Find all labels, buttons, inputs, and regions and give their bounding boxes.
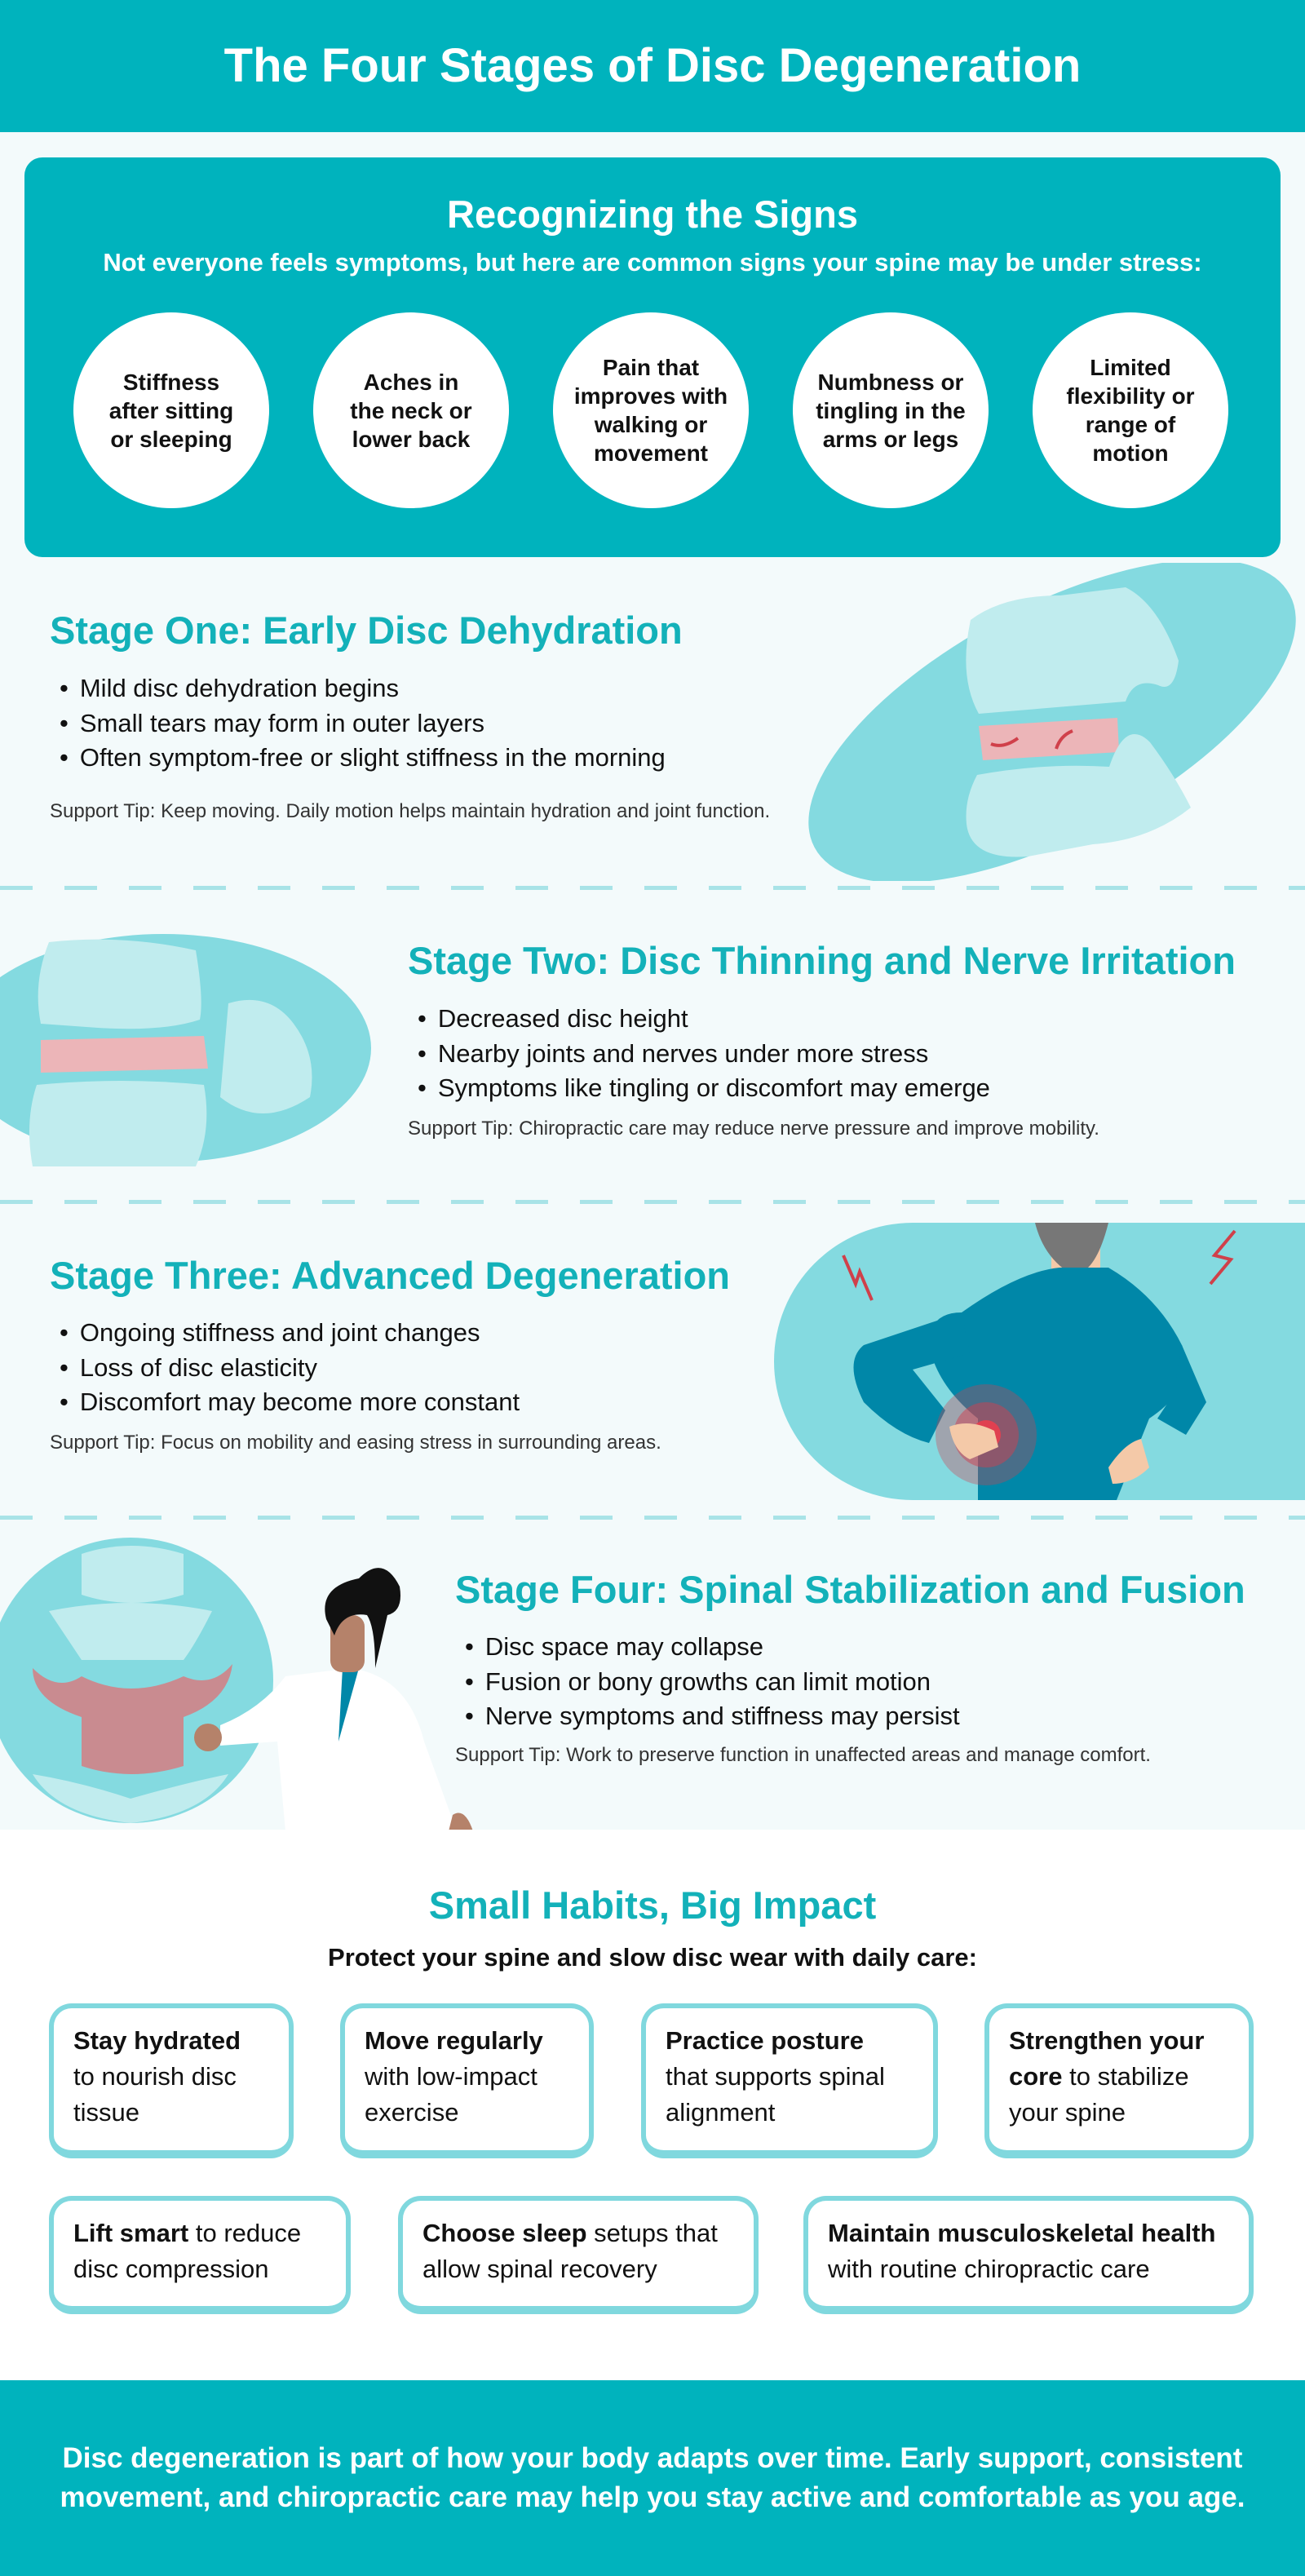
sign circle 2 [313,312,509,508]
stage three bullets: Ongoing stiffness and joint changes [80,1318,480,1347]
card: hydrated: to nourish disc [73,2062,237,2091]
stage two bullets [418,1004,990,1102]
card: hydrated: tissue [73,2098,139,2127]
card: core: your spine [1009,2098,1126,2127]
stage one bullets: Often symptom-free or slight stiffness in the morning [80,743,666,772]
stage four bullets [466,1632,960,1730]
card: lift: disc compression [73,2255,268,2283]
card: core [984,2003,1254,2158]
card: sleep: Choose sleep setups that [422,2219,718,2247]
section: small habits [0,1830,1305,2380]
stage four heading: Stage Four: Spinal Stabilization and Fusion [455,1568,1245,1611]
stage three bullets: Loss of disc elasticity [80,1352,317,1382]
sign circle 5 [1033,312,1228,508]
illustration: fused spine circle and doctor [0,1538,473,1830]
header banner: The Four Stages of Disc Degeneration [224,39,1081,92]
stage two tip: Support Tip: Chiropractic care may reduce nerve pressure and improve mobility. [408,1118,1099,1140]
card: lift [49,2196,351,2314]
card: musculoskeletal: with routine chiropractic care [828,2255,1150,2283]
card: hydrated [49,2003,294,2158]
signs heading: Recognizing the Signs [447,193,858,236]
illustration: back pain person [774,1223,1305,1500]
footer banner [0,2380,1305,2576]
card: musculoskeletal [803,2196,1254,2314]
stage one bullets [60,674,666,772]
sign circle 4 [793,312,989,508]
sign circle 1: or sleeping [110,426,232,452]
sign circle 4: arms or legs [823,426,958,452]
panel: recognizing the signs [24,157,1281,557]
card: posture [641,2003,938,2158]
stage one bullets: Mild disc dehydration begins [80,674,399,702]
illustration: stage two spine ellipse [0,934,371,1166]
sign circle 4: Numbness or [818,369,963,395]
stage three heading: Stage Three: Advanced Degeneration [50,1254,730,1297]
stage one bullets: Small tears may form in outer layers [80,708,484,737]
sign circle 3 [553,312,749,508]
signs subtitle: Not everyone feels symptoms, but here are common signs your spine may be under stress: [103,248,1202,277]
sign circle 2: the neck or [350,398,472,423]
sign circle 1: after sitting [109,398,233,423]
footer banner: Disc degeneration is part of how your body adapts over time. Early support, consistent [63,2442,1242,2474]
stage four bullets: Disc space may collapse [485,1632,763,1661]
card: musculoskeletal: Maintain musculoskeletal health [828,2219,1215,2247]
sign circle 5: range of [1086,412,1175,437]
stage one tip: Support Tip: Keep moving. Daily motion helps maintain hydration and joint function. [50,800,770,822]
stage one heading: Stage One: Early Disc Dehydration [50,609,683,652]
sign circle 4: tingling in the [816,398,966,423]
card: sleep: allow spinal recovery [422,2255,657,2283]
stage two bullets: Symptoms like tingling or discomfort may emerge [438,1073,990,1102]
sign circle 1: Stiffness [123,369,219,395]
sign circle 3: movement [594,440,708,466]
card: hydrated: Stay hydrated [73,2026,241,2055]
stage two bullets: Nearby joints and nerves under more stress [438,1039,928,1067]
sign circle 3: improves with [574,383,728,409]
stage four bullets: Nerve symptoms and stiffness may persist [485,1702,960,1730]
stage three bullets [60,1318,520,1416]
illustration: stage one spine ellipse [808,563,1296,881]
card: core: Strengthen your [1009,2026,1204,2055]
header banner [0,0,1305,132]
habits subtitle: Protect your spine and slow disc wear with daily care: [328,1943,977,1972]
sign circle 1 [73,312,269,508]
sign circle 5: motion [1092,440,1169,466]
card: posture: that supports spinal [666,2062,885,2091]
stage four bullets: Fusion or bony growths can limit motion [485,1667,931,1695]
card: move [340,2003,594,2158]
stage two bullets: Decreased disc height [438,1004,688,1033]
sign circle 5: flexibility or [1066,383,1195,409]
card: sleep [398,2196,759,2314]
stage two heading: Stage Two: Disc Thinning and Nerve Irritation [408,939,1236,982]
card: move: with low-impact [365,2062,537,2091]
card: core: core to stabilize [1009,2062,1189,2091]
card: posture: Practice posture [666,2026,864,2055]
stage three bullets: Discomfort may become more constant [80,1388,520,1416]
sign circle 3: walking or [595,412,707,437]
stage four tip: Support Tip: Work to preserve function in unaffected areas and manage comfort. [455,1744,1151,1766]
card: move: exercise [365,2098,458,2127]
card: move: Move regularly [365,2026,543,2055]
sign circle 2: lower back [352,426,470,452]
sign circle 3: Pain that [603,355,699,380]
sign circle 5: Limited [1090,355,1171,380]
stage three tip: Support Tip: Focus on mobility and easing stress in surrounding areas. [50,1432,661,1454]
card: posture: alignment [666,2098,775,2127]
habits heading: Small Habits, Big Impact [429,1883,876,1927]
sign circle 2: Aches in [364,369,458,395]
footer banner: movement, and chiropractic care may help you stay active and comfortable as you age. [60,2481,1245,2513]
card: lift: Lift smart to reduce [73,2219,301,2247]
